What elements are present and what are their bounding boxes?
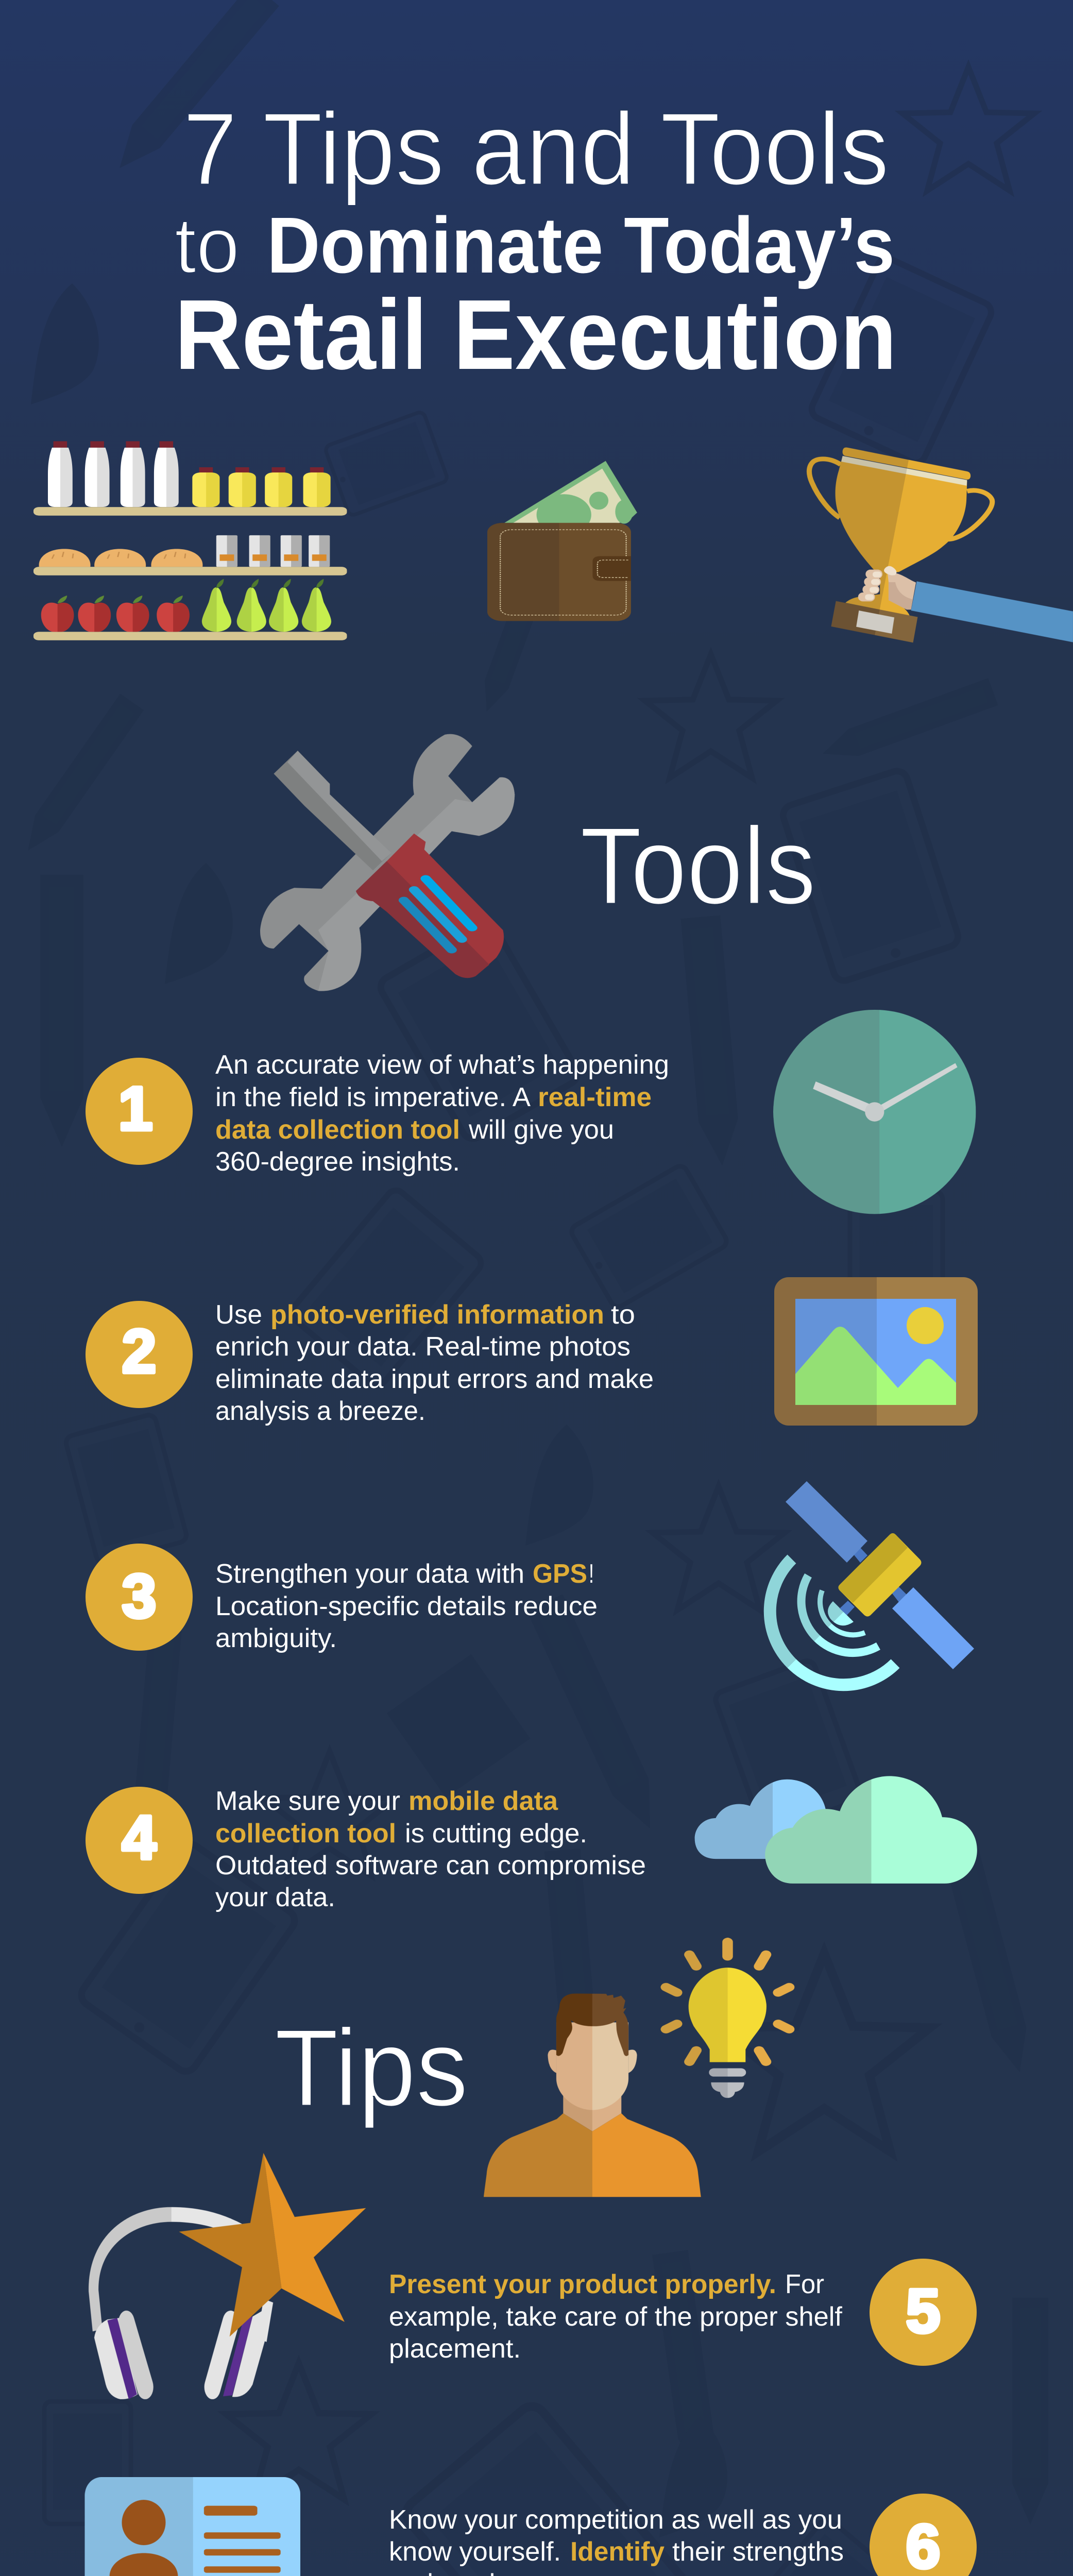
tool 4 text xyxy=(215,1786,646,1912)
number badge 5 xyxy=(870,2259,977,2366)
icon: ID card xyxy=(85,2477,300,2576)
tool 2 text: analysis a breeze. xyxy=(215,1396,425,1426)
icon: picture frame xyxy=(774,1277,978,1426)
headphones xyxy=(94,2214,271,2399)
number badge 4 xyxy=(86,1787,193,1894)
number badge 6 xyxy=(870,2494,977,2576)
tip 6 text: Identify xyxy=(570,2537,665,2567)
tool 2 text: photo-verified information xyxy=(270,1300,604,1330)
tool 1 text: data collection tool xyxy=(215,1115,460,1145)
tool 3 xyxy=(86,1544,598,1653)
bread loaves xyxy=(39,549,202,567)
tool 2 text: Use xyxy=(215,1300,262,1330)
tip 6 text xyxy=(389,2505,844,2576)
tool 2 xyxy=(86,1300,654,1426)
tip 5 text: placement. xyxy=(389,2334,521,2364)
tool 2 text: eliminate data input errors and make xyxy=(215,1364,654,1394)
tip 5 xyxy=(389,2259,977,2366)
tool 4 text: is cutting edge. xyxy=(405,1819,587,1849)
tool 4 text: collection tool xyxy=(215,1819,396,1849)
icon: wallet with cash xyxy=(487,461,637,621)
tool 1 xyxy=(86,1050,669,1177)
tool 1 text: An accurate view of what’s happening xyxy=(215,1050,669,1080)
tool 3 text: ! xyxy=(589,1559,594,1589)
cans xyxy=(216,535,330,567)
tool 2 text: enrich your data. Real-time photos xyxy=(215,1332,631,1362)
icon: wrench and screwdriver xyxy=(260,734,515,991)
icon: person xyxy=(484,1993,701,2197)
tool 4 text: Outdated software can compromise xyxy=(215,1851,646,1880)
tool 4 text: mobile data xyxy=(408,1786,558,1816)
icon: light bulb xyxy=(666,1942,789,2098)
heading: Tips: Tips xyxy=(275,2007,468,2129)
tip 6 text: Know your competition as well as you xyxy=(389,2505,842,2535)
tool 2 text: to xyxy=(611,1300,635,1330)
number badge 4: 4 xyxy=(122,1803,157,1872)
apples xyxy=(41,596,190,632)
number badge 5: 5 xyxy=(906,2277,940,2346)
tool 3 text: ambiguity. xyxy=(215,1623,337,1653)
tool 2 text xyxy=(215,1300,654,1426)
tip 6 text: their strengths xyxy=(672,2537,844,2567)
tool 1 text: 360-degree insights. xyxy=(215,1147,460,1177)
shelf boards xyxy=(33,507,347,640)
tip 5 text: For xyxy=(785,2269,824,2299)
tool 4 xyxy=(86,1786,646,1912)
tool 3 text: GPS xyxy=(533,1559,587,1589)
star xyxy=(179,2153,366,2337)
tool 3 text: Location-specific details reduce xyxy=(215,1591,598,1621)
icon: headphones and star xyxy=(94,2153,366,2399)
title xyxy=(175,92,897,390)
pears xyxy=(202,579,331,632)
number badge 3 xyxy=(86,1544,193,1651)
tip 6 text: know yourself. xyxy=(389,2537,561,2567)
icon: clouds xyxy=(695,1776,977,1884)
title: Retail Execution xyxy=(175,279,897,390)
yellow bottles xyxy=(192,467,331,507)
tool 3 text xyxy=(215,1559,598,1653)
tip 5 text: Present your product properly. xyxy=(389,2269,776,2299)
number badge 2 xyxy=(86,1301,193,1408)
tool 4 text: your data. xyxy=(215,1883,335,1912)
title: to xyxy=(175,201,240,290)
number badge 1 xyxy=(86,1058,193,1165)
tool 1 text: in the field is imperative. A xyxy=(215,1082,531,1112)
icon: trophy held by arm xyxy=(809,447,1073,642)
tool 1 text: real-time xyxy=(538,1082,652,1112)
tip 5 text: example, take care of the proper shelf xyxy=(389,2302,843,2332)
number badge 2: 2 xyxy=(122,1317,156,1386)
tip 5 text xyxy=(389,2269,843,2364)
icon: store shelves xyxy=(33,441,347,640)
back cloud xyxy=(695,1780,826,1859)
title: 7 Tips and Tools xyxy=(183,92,889,207)
title: Dominate Today’s xyxy=(267,201,895,290)
front cloud xyxy=(765,1776,977,1884)
heading: Tools: Tools xyxy=(580,805,816,927)
tool 3 text: Strengthen your data with xyxy=(215,1559,524,1589)
tool 1 text: will give you xyxy=(468,1115,614,1145)
tip 6 xyxy=(389,2494,977,2576)
milk bottles xyxy=(48,441,179,507)
tool 1 text xyxy=(215,1050,669,1177)
number badge 1: 1 xyxy=(118,1074,152,1143)
icon: satellite xyxy=(770,1481,974,1685)
icon: clock xyxy=(773,1010,976,1214)
number badge 3: 3 xyxy=(122,1562,156,1631)
tool 4 text: Make sure your xyxy=(215,1786,400,1816)
